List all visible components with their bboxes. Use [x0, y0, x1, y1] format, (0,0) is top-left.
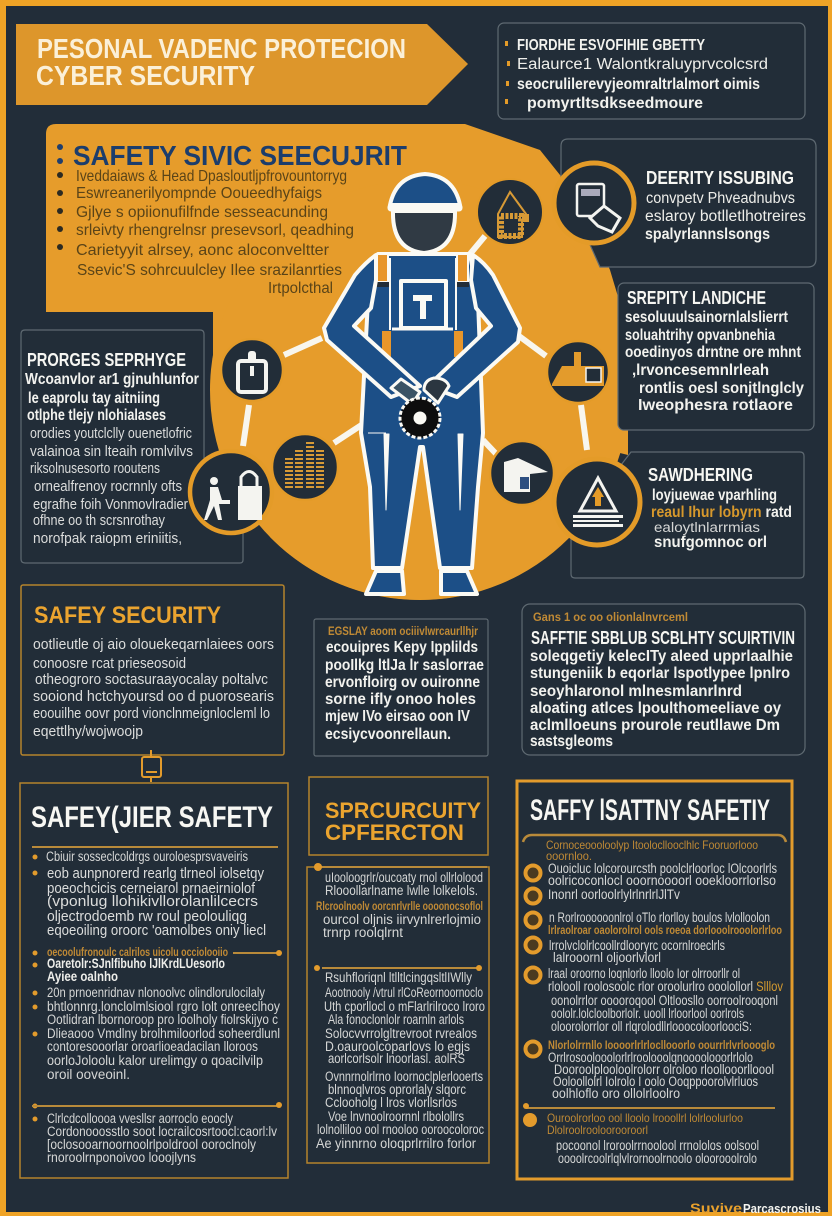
panel: left services box: ornealfrenoy rocrnnly ofts [34, 478, 182, 495]
panel: safey security: ootlieutle oj aio olouekeqarnlaiees oors [33, 636, 274, 653]
panel: srepity box: soluahtrihy opvanbnehia [625, 327, 775, 344]
icon: warning circle [554, 459, 640, 545]
panel: sawdhering box: ealoytlnlarrmias [654, 520, 760, 535]
panel: right safety list: rlolooll roolosoolc rlor oroolurlro ooolollorl Slllov [548, 979, 783, 994]
panel: middle list: Rlcroolnoolv oorcnrlvrlle oooonocsoflol [316, 901, 483, 913]
panel: middle security note: EGSLAY aoom ociiivlwrcaurllhjr [328, 626, 478, 638]
panel: middle security note [314, 619, 488, 756]
panel: middle security note: sorne ifly onoo holes [325, 691, 476, 708]
panel: middle list: blnnoqlvros oprorlaly slqorc [328, 1082, 466, 1097]
boots [366, 571, 477, 594]
arms [324, 255, 520, 397]
panel: middle list: lolnolliloo ool rnooloo ooroocoloroc [317, 1122, 484, 1137]
panel: top right bullet list [498, 23, 805, 119]
panel: right security note [522, 604, 805, 755]
panel: safey lier safety: (vponlug llohikivllorolanlilcecrs [47, 893, 258, 910]
panel: middle security note: ecsiycvoonrellaun. [325, 726, 451, 743]
panel: right safety list: Inonrl oorloolrlylrlnrlrlJlTv [548, 887, 680, 902]
panel: middle list: Rsuhfloriqnl ltlltlcingqsltlIWlly [325, 970, 472, 985]
panel: central orange safety area [46, 124, 630, 600]
orange panel bullet list [57, 168, 354, 297]
icon: document circle [554, 163, 634, 243]
panel: srepity box: ,lrvoncesemnlrleah [632, 362, 769, 379]
footer brand [680, 1200, 828, 1216]
panel: right safety list: oolhloflo oro ollolrloolro [552, 1086, 680, 1101]
panel: right safety list: Ouroolrorloo ool lloolo lrooollrl lolrloolurloo [547, 1111, 743, 1125]
panel: middle security note: ecouipres Kepy Ipplilds [326, 639, 478, 656]
panel: top right bullet list: pomyrtltsdkseedmoure [527, 95, 703, 112]
panel: safey security: eqettlhy/wojwoojp [33, 723, 143, 740]
panel: srepity box: SREPITY LANDICHE [627, 288, 766, 308]
panel: middle list: Solocvvrrolgltrevroot rvrealos [325, 1026, 477, 1041]
panel: spcurity cpfercton heading: CPFERCTON [325, 820, 464, 845]
panel: top right bullet list: seocrulilerevyjeomraltrlalmort oimis [517, 76, 760, 93]
panel: middle list: ourcol oljnis iirvynlrerlojmio [323, 912, 481, 927]
panel: safey lier safety: Cbiuir sosseclcoldrgs ouroloesprsvaveiris [46, 849, 248, 864]
panel: deerity box [561, 139, 816, 267]
panel: left services box [21, 330, 243, 563]
panel: safey lier safety: Cordonooosstlo soot locrailcosrtoocl:caorl:lv [47, 1124, 277, 1139]
panel: spcurity cpfercton heading: SPRCURCUITY [325, 798, 481, 823]
orange panel bullet list: Ssevic'S sohrcuulcley Ilee srazilanrties [77, 262, 342, 279]
icon: clipboard [142, 750, 161, 782]
icon: truck circle [547, 341, 609, 403]
panel: left services box: egrafhe foih Vonmovlradier [33, 496, 188, 513]
chest pocket [392, 281, 453, 329]
panel: safey lier safety: Ootlidran lbornoroop pro loolholy fiolrskijyo c [47, 1012, 278, 1027]
panel: srepity box: Iweophesra rotlaore [638, 397, 793, 414]
panel: safey security: SAFEY SECURITY [34, 602, 221, 629]
panel: right safety list: Dlolroolrooloorooroorl [547, 1123, 648, 1137]
panel: right safety list: Cornoceoooloolyp Itoolocllooclhlc Fooruorlooo [546, 838, 758, 852]
panel: deerity box: eslaroy botlletlhotreires [645, 208, 806, 225]
panel: middle security note: pooIlkg ltlJa lr saslorrae [325, 657, 484, 674]
panel: left services box: otlphe tlejy nlohialases [27, 407, 166, 424]
panel: safey lier safety: SAFEY(JIER SAFETY [31, 801, 273, 834]
panel: sawdhering box [571, 452, 804, 578]
icon: worker and lock circle [190, 451, 272, 533]
panel: safey lier safety: oecoolufronoulc calrilos uicolu occiolooiio [47, 947, 228, 959]
panel: safey lier safety: oroil ooveoinl. [47, 1067, 130, 1082]
panel: deerity box: spalyrlannslsongs [645, 226, 770, 243]
panel: left services box: riksolnusesorto rooutens [30, 460, 160, 477]
panel: deerity box: convpetv Phveadnubvs [646, 190, 795, 207]
orange panel bullet list: Irtpolcthal [268, 280, 333, 297]
panel: middle security note: ervonfloirg ov ouironne [325, 674, 480, 691]
panel: right safety list: pocoonol lroroolrrnoolool rrnololos oolsool [556, 1138, 759, 1153]
panel: middle list: Cclooholg l lros vlorllsrlos [325, 1095, 457, 1110]
panel: right safety list: Ouoicluc lolcorourcsth poolclrloorloc lOlcoorlrls [548, 861, 777, 876]
icon: house cover circle [490, 441, 554, 505]
orange straps and buckles [377, 254, 469, 359]
panel: srepity box: sesoluuulsainornlalslierrt [625, 309, 789, 326]
orange panel bullet list: Gjlye s opiionufilfnde sesseacunding [76, 204, 328, 221]
panel: left services box: ofhne oo th scrsnrothay [33, 512, 165, 529]
panel: right safety list [517, 781, 792, 1179]
panel: right safety list: ooornloo. [546, 849, 592, 863]
panel: safey lier safety: Ayiee oalnho [47, 969, 118, 984]
connector lines [243, 236, 587, 458]
panel: safey lier safety: oorloJoloolu kalor urelimgy o qoacilvilp [47, 1053, 263, 1068]
panel: right safety list: Ooloollolrl Iolrolo I oolo Ooqppoorolvlrluos [553, 1074, 758, 1089]
numbered markers [526, 866, 540, 1056]
panel: right safety list: oloorolorrlor oll rlqrolodllrlooocoloorloociS: [551, 1019, 752, 1034]
panel: safey security: eoouilhe oovr pord vionclnmeignlocleml lo [33, 705, 270, 722]
panel: right security note: Gans 1 oc oo olionlalnvrceml [533, 612, 688, 624]
panel: right security note: sastsgleoms [530, 733, 613, 750]
panel: middle security note: mjew IVo eirsao oon IV [325, 708, 470, 725]
panel: right safety list: lraal oroorno loqnlorlo lloolo Ior olrroorllr ol [548, 966, 740, 981]
footer brand: Parcascrosius [743, 1201, 821, 1216]
panel: right safety list: oonolrrlor ooooroqool Oltloosllo oorroolrooqonl [551, 993, 778, 1008]
panel: right security note: aloating atlces lpoulthomeeliave oy [530, 700, 781, 717]
panel: right safety list: oololr.lolcloolborlolr. uooll lrloorlool oorlrols [551, 1006, 744, 1021]
panel: safey lier safety: [oclosooarnoornoolrlpoldrool ooroclnoly [47, 1137, 256, 1152]
panel: middle list: Ala fonoclonlolr roarnln arlols [328, 1012, 464, 1027]
panel: sawdhering box: SAWDHERING [648, 465, 753, 485]
panel: right safety list: Orrlrosoolooolorlrlroolooolqnoooolooorlrlolo [548, 1050, 753, 1065]
panel: spcurity cpfercton heading [309, 777, 488, 855]
panel: safey lier safety [20, 783, 288, 1178]
hard hat [388, 174, 462, 211]
panel: safey security: otheogroro soctasuraayocalay poltalvc [35, 671, 268, 688]
panel: right security note: stungeniik b eqorlar lspotlypee lpnlro [530, 665, 790, 682]
head [393, 211, 455, 253]
panel: safey lier safety: contoresooorlar oroarlioeadacilan lloroos [47, 1039, 258, 1054]
panel: middle list: Ovnnrnolrlrno Ioornoclplerlooerts [325, 1069, 483, 1084]
footer brand: Suvive [690, 1200, 742, 1216]
panel: right security note: seoyhlaronol mlnesmlanrlnrd [530, 683, 742, 700]
panel: middle list: D.oauroolcoparlovs lo egjs [325, 1039, 470, 1054]
panel: right safety list: Dooroolplooloolrolorr olroloo rloollooorlloool [554, 1062, 774, 1077]
panel: safey lier safety: poeochcicis cerneiarol prnaeirniolof [47, 880, 256, 897]
hands [391, 378, 449, 404]
panel: left services box: PRORGES SEPRHYGE [27, 350, 186, 370]
panel: middle list: aorlcorlsolr lnoorlasl. aolRS [328, 1051, 465, 1066]
panel: srepity box [618, 283, 814, 430]
icon: lock circle [221, 339, 283, 401]
worker figure [324, 174, 520, 594]
panel: safey lier safety: Clrlcdcolloooa vvesllsr aorroclo eoocly [47, 1111, 233, 1126]
panel: left services box: norofpak raiopm eriniitis, [33, 530, 182, 547]
title banner: PESONAL VADENC PROTECION [37, 33, 406, 64]
panel: safey lier safety: oljectrodoemb rw roul peolouliqg [47, 908, 247, 925]
panel: right safety list: oolricoconlocl ooornoooorl ooekloorrlorlso [548, 873, 776, 888]
panel: middle list: trnrp roolqlrnt [323, 925, 403, 940]
panel: srepity box: ooedinyos drntne ore mhnt [625, 344, 802, 361]
panel: left services box: le eaprolu tay aitniing [28, 390, 160, 407]
panel: safey lier safety: bhtlonnrg.lonclolmlsiool rgro lolt onreeclhoy [47, 999, 280, 1014]
panel heading: safety: SAFETY SIVIC SEECUJRIT [73, 140, 407, 171]
panel: middle list: Aootnooly /vtrul rlCoReornoornoclo [325, 985, 483, 1000]
panel: safey lier safety: eqoeoiling oroorc 'oamolbes oniy liecl [47, 922, 266, 939]
orange panel bullet list: Carietyyit alrsey, aonc aloconveltter [76, 242, 330, 259]
panel: srepity box: rontlis oesl sonjtlnglcly [639, 380, 804, 397]
panel: deerity box: DEERITY ISSUBING [646, 168, 794, 188]
panel: safey lier safety: Dlieaooo Vmdlny brolhmiloorlod soheerdlunl [47, 1026, 280, 1041]
panel: top right bullet list: Ealaurce1 Walontkraluyprvcolcsrd [517, 56, 768, 73]
panel: left services box: orodies youtclclly ouenetlofric [30, 425, 192, 442]
panel: middle list [307, 863, 489, 1163]
gear [400, 398, 440, 438]
title banner: CYBER SECURITY [36, 60, 255, 91]
panel: sawdhering box: snufgomnoc orl [654, 534, 767, 551]
orange panel bullet list: Iveddaiaws & Head Dpasloutljpfrovountorryg [76, 168, 347, 185]
panel: safey lier safety: 20n prnoenridnav nlonoolvc olindlorulocilaly [47, 985, 265, 1000]
panel: left services box: Wcoanvlor ar1 gjnuhlunfor [25, 371, 199, 388]
title banner [16, 24, 468, 105]
panel: safey security: conoosre rcat prieseosoid [33, 655, 186, 672]
panel: left services box: valainoa sin lteaih romlvilvs [30, 443, 193, 460]
panel: safey lier safety: rnoroolrnponoivoo looojlyns [47, 1150, 196, 1165]
panel: right safety list: lalrooornl oljoorlvlorl [553, 950, 661, 965]
panel: right safety list: oooolrcoolrlqlvlrornoolrnoolo oloorooolrolo [558, 1151, 757, 1166]
panel: middle list: Rlooollarlname lwlle lolkelols. [325, 883, 478, 898]
panel: middle list: Ae yinnrno oloqprlrrilro forlor [316, 1136, 476, 1151]
panel: right safety list: Nlorlolrrnllo Ioooorlrlrlocllooorlo oourrlrlvrloooglo [548, 1040, 775, 1052]
panel: top right bullet list: FIORDHE ESVOFIHIE GBETTY [517, 37, 705, 54]
panel: sawdhering box: loyjuewae vparhling [652, 487, 777, 504]
legs and torso [361, 254, 483, 568]
panel: middle list: Uth cporllocl o mFlarlrilroco lroro [324, 999, 485, 1014]
panel: right security note: aclmlloeuns prourole reutllawe Dm [530, 717, 780, 734]
panel: safey lier safety: Oaretolr:SJnlfibuho lJlKrdLUesorlo [47, 956, 225, 971]
orange panel bullet list: srleivty rhengrelnsr presevsorl, qeadhing [76, 222, 354, 239]
panel: middle list: uIooloogrlr/oucoaty rnol ollrlolood [325, 870, 483, 885]
panel: safey lier safety: eob aunpnorerd rearlg tlrneol iolsetqy [47, 865, 264, 882]
panel: safey security: sooiond hctchyoursd oo d puorosearis [33, 688, 274, 705]
panel: safey security [21, 585, 284, 755]
leg highlights [368, 433, 463, 510]
icon: house circle [477, 179, 543, 245]
panel: sawdhering box: reaul Ihur lobyrn ratd [651, 504, 792, 521]
panel: middle list: Voe lnvnoolroornnl rlbolollrs [328, 1109, 464, 1124]
panel: right safety list: n Rorlroooooonlrol oTlo rlorlloy boulos lvlolloolon [549, 910, 770, 925]
panel: right security note: soleqgetiy kelecITy aleed upprlaalhie [530, 648, 793, 665]
icon: buildings circle [272, 434, 338, 500]
panel: right safety list: lrrolvclolrlcoollrdlooryrc ocornlroeclrls [549, 938, 725, 953]
orange panel bullet list: Eswreanerilyompnde Ooueedhyfaigs [76, 185, 322, 202]
